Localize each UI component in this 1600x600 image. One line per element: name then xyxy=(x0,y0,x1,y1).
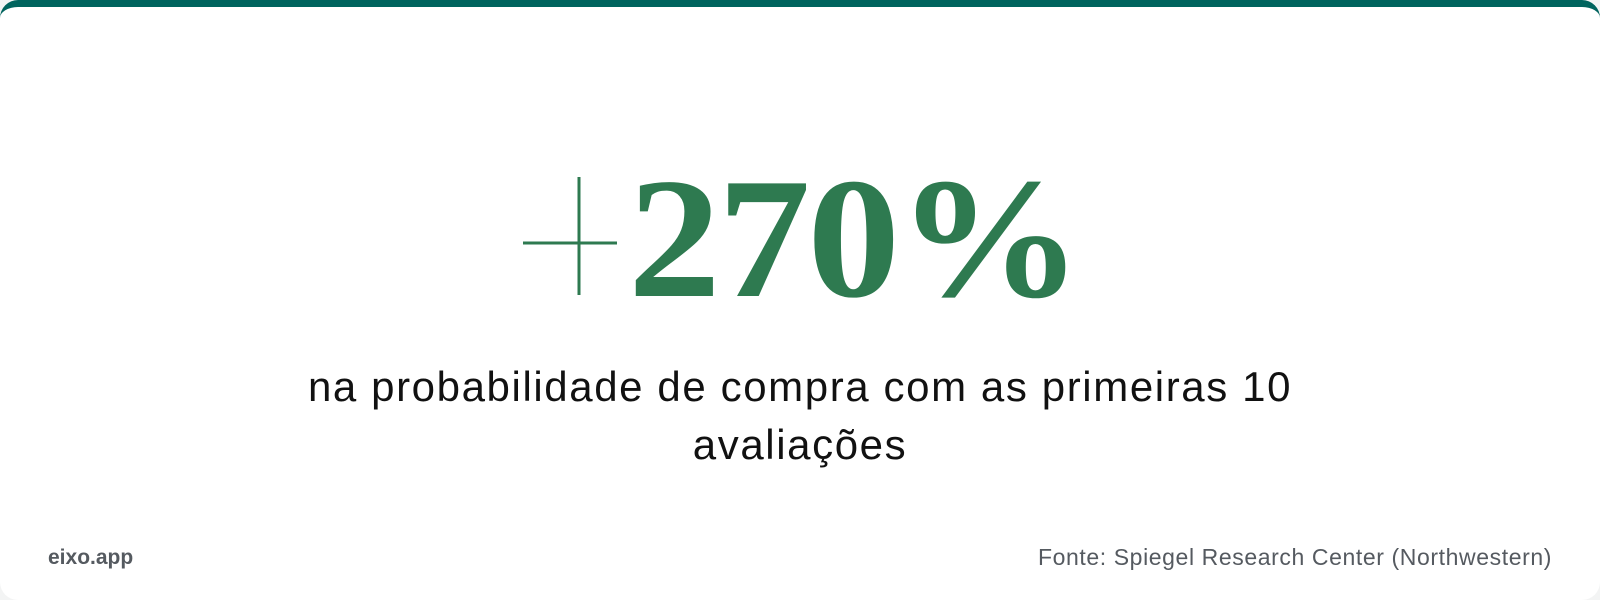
subtitle: avaliações xyxy=(693,421,907,468)
icon: plus sign xyxy=(523,177,617,295)
subtitle: na probabilidade de compra com as primeiras 10 xyxy=(308,363,1292,410)
digits 270%: 270% xyxy=(628,144,1079,334)
big number xyxy=(523,144,1079,334)
source: Fonte: Spiegel Research Center (Northwestern) xyxy=(1038,544,1552,570)
brand: eixo.app xyxy=(48,546,133,569)
subtitle xyxy=(308,363,1292,468)
